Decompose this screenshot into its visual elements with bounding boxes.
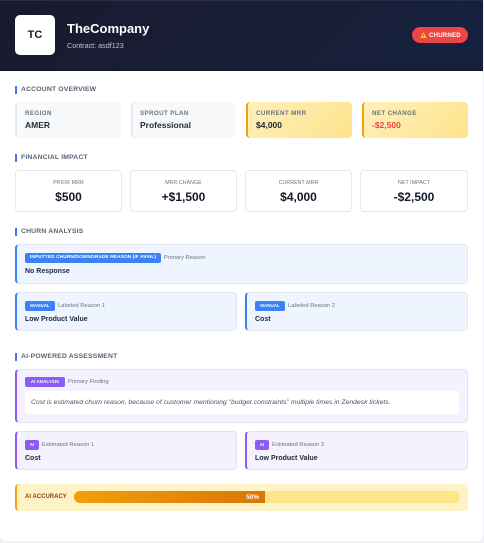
label: primary finding: Primary Finding bbox=[68, 379, 109, 385]
tag: ai: AI bbox=[260, 442, 264, 447]
card: net change: NET CHANGE bbox=[372, 110, 417, 116]
value: no response: No Response bbox=[25, 268, 70, 274]
panel: ai accuracy bbox=[15, 484, 468, 511]
metric: prior mrr bbox=[15, 170, 122, 212]
metric: current mrr: $4,000 bbox=[280, 190, 317, 204]
tag: ai analysis bbox=[25, 377, 65, 387]
tag: ai: AI bbox=[30, 442, 34, 447]
card: region bbox=[15, 102, 121, 138]
tag: ai bbox=[255, 440, 269, 450]
panel: labeled reason 1 bbox=[15, 292, 237, 331]
label: ai accuracy: AI ACCURACY bbox=[25, 494, 67, 500]
panel: labeled reason 2 bbox=[245, 292, 468, 331]
section heading: account overview: ACCOUNT OVERVIEW bbox=[21, 86, 96, 93]
metric: mrr change: MRR CHANGE bbox=[165, 180, 202, 186]
label: labeled reason 1: Labeled Reason 1 bbox=[58, 302, 105, 308]
card: region: REGION bbox=[25, 110, 52, 116]
card: region: AMER bbox=[25, 120, 50, 130]
metric: net impact bbox=[360, 170, 468, 212]
progress fill: 50%: 50% bbox=[246, 494, 259, 501]
header banner bbox=[0, 0, 483, 71]
tag: manual bbox=[25, 300, 55, 310]
value: cost: Cost bbox=[25, 454, 41, 462]
label: primary reason: Primary Reason bbox=[164, 254, 206, 260]
panel: primary finding bbox=[15, 369, 468, 423]
progress bar bbox=[74, 491, 460, 503]
metric: prior mrr: $500 bbox=[55, 190, 82, 204]
finding text: Cost is estimated churn reason, because of customer mentioning "budget constraints" multiple times in Zendesk tickets. bbox=[31, 399, 391, 406]
tag: ai analysis: AI ANALYSIS bbox=[31, 379, 59, 384]
section heading: ai-powered assessment: AI-POWERED ASSESSMENT bbox=[21, 353, 117, 360]
panel: primary reason bbox=[15, 244, 468, 284]
card: sprout plan: SPROUT PLAN bbox=[140, 110, 189, 116]
card: sprout plan bbox=[131, 102, 236, 138]
card: net change: -$2,500 bbox=[372, 120, 401, 130]
value: low product value: Low Product Value bbox=[255, 454, 318, 462]
tag: manual: MANUAL bbox=[260, 302, 280, 308]
section heading: financial impact: FINANCIAL IMPACT bbox=[21, 154, 88, 161]
metric: mrr change bbox=[130, 170, 237, 212]
tag: ai bbox=[25, 440, 39, 450]
metric: mrr change: +$1,500 bbox=[162, 190, 205, 204]
tag: inputted reason bbox=[25, 252, 161, 262]
tag: manual bbox=[255, 300, 285, 310]
metric: net impact: NET IMPACT bbox=[398, 180, 430, 186]
logo: TC bbox=[15, 15, 55, 55]
card: current mrr bbox=[246, 102, 352, 138]
card: current mrr: CURRENT MRR bbox=[256, 110, 306, 116]
metric: net impact: -$2,500 bbox=[394, 190, 434, 204]
icon: warning bbox=[420, 32, 427, 38]
label: labeled reason 2: Labeled Reason 2 bbox=[288, 302, 335, 308]
value: cost: Cost bbox=[255, 316, 271, 322]
panel: estimated reason 1 bbox=[15, 431, 237, 470]
metric: prior mrr: PRIOR MRR bbox=[53, 180, 84, 186]
card: sprout plan: Professional bbox=[140, 120, 191, 130]
value: low product value: Low Product Value bbox=[25, 316, 88, 322]
company name: TheCompany bbox=[67, 21, 149, 36]
status badge: churned bbox=[412, 27, 468, 43]
label: estimated reason 2: Estimated Reason 2 bbox=[272, 442, 324, 448]
status badge: churned: CHURNED bbox=[429, 32, 461, 39]
finding text bbox=[25, 391, 459, 414]
label: estimated reason 1: Estimated Reason 1 bbox=[42, 442, 94, 448]
logo: TC: TC bbox=[28, 29, 42, 41]
tag: manual: MANUAL bbox=[30, 302, 50, 308]
progress fill: 50% bbox=[74, 491, 265, 503]
panel: estimated reason 2 bbox=[245, 431, 468, 470]
card: net change bbox=[362, 102, 468, 138]
card: current mrr: $4,000 bbox=[256, 120, 282, 130]
metric: current mrr: CURRENT MRR bbox=[279, 180, 318, 186]
section heading: churn analysis: CHURN ANALYSIS bbox=[21, 228, 83, 235]
tag: inputted reason: INPUTTED CHURN/DOWNGRADE REASON (IF AVAIL) bbox=[30, 254, 156, 260]
metric: current mrr bbox=[245, 170, 352, 212]
contract id: Contract: asdf123 bbox=[67, 41, 124, 50]
